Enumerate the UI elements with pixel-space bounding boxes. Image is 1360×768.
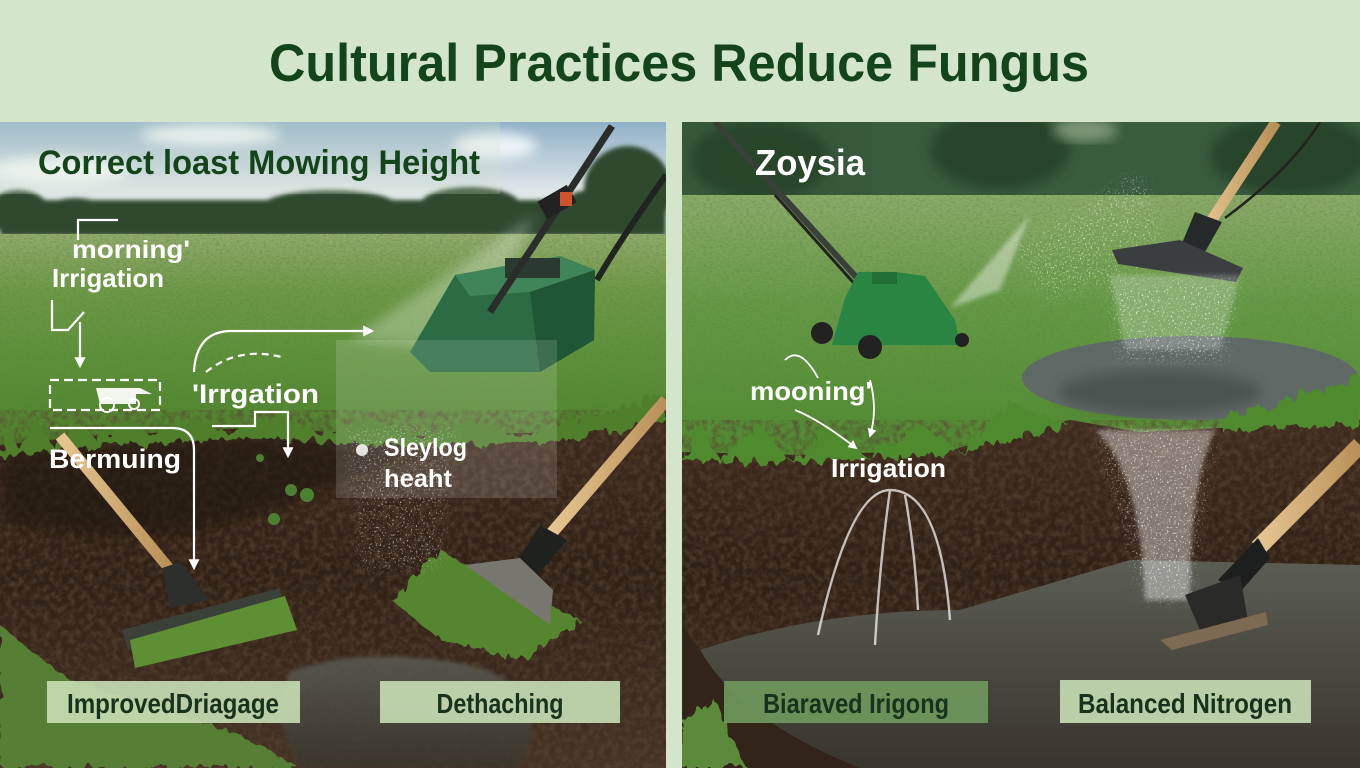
diagram lines and arrows — [50, 220, 372, 568]
sky — [0, 122, 666, 237]
label: Sleylog heaht: heaht — [384, 465, 453, 493]
tag: Improved Driagage — [47, 681, 300, 723]
label: Irrigation: Irrigation — [831, 453, 946, 483]
lawn — [0, 234, 666, 449]
diagram arrows — [785, 355, 874, 448]
grass fringe — [682, 400, 1070, 462]
hoe lower right — [1160, 445, 1360, 650]
header band — [0, 0, 1360, 122]
tree background — [682, 122, 1360, 202]
foreground grass — [0, 625, 300, 768]
label: Sleylog heaht — [384, 438, 466, 487]
tag: Dethaching — [380, 681, 620, 723]
label: Bermuing: Bermuing — [49, 444, 181, 474]
pond lower — [700, 560, 1360, 768]
soil — [682, 420, 1360, 768]
tag: Improved Driagage: ImprovedDriagage — [67, 688, 279, 719]
soil — [0, 410, 666, 768]
leaves and spray droplets — [256, 454, 314, 525]
panel: right photo scene — [682, 110, 1360, 768]
panel heading: Zoysia: Zoysia — [755, 142, 866, 183]
mower — [410, 126, 666, 372]
pond upper — [1022, 336, 1358, 420]
grass fringe — [0, 392, 666, 456]
tag: Biaraved Irigong: Biaraved Irigong — [763, 688, 949, 719]
label: Irrgation: 'Irrgation — [192, 379, 319, 409]
rake left — [60, 436, 297, 668]
title: Cultural Practices Reduce Fungus — [269, 34, 1089, 93]
icon: small tractor — [96, 388, 152, 412]
water streams — [1095, 275, 1240, 600]
sprinkler rake — [1112, 122, 1320, 282]
tag: Biaraved Irigong — [724, 681, 988, 723]
tag: Dethaching: Dethaching — [436, 688, 564, 719]
heading band — [0, 122, 500, 194]
panel heading: Correct loast Mowing Height — [38, 144, 480, 182]
puddle — [282, 656, 532, 768]
tag: Balanced Nitrogen — [1060, 680, 1311, 723]
translucent overlay box — [336, 340, 557, 498]
spray from mower — [950, 215, 1030, 308]
panel: left photo scene — [0, 122, 672, 768]
lawn — [682, 195, 1360, 455]
tag: Balanced Nitrogen: Balanced Nitrogen — [1078, 688, 1292, 719]
label: mooning: mooning' — [750, 376, 872, 406]
label: Sleylog heaht: Sleylog — [384, 434, 467, 462]
foreground grass tufts — [682, 700, 745, 768]
panel heading: Zoysia — [682, 122, 872, 194]
hoe right — [392, 400, 666, 660]
label: Irrigation: Irrigation — [52, 263, 164, 293]
mower — [715, 122, 969, 359]
label: morning: morning' — [72, 236, 190, 264]
fountain streams — [818, 490, 950, 645]
treeline — [0, 146, 672, 236]
water spray — [350, 215, 535, 350]
